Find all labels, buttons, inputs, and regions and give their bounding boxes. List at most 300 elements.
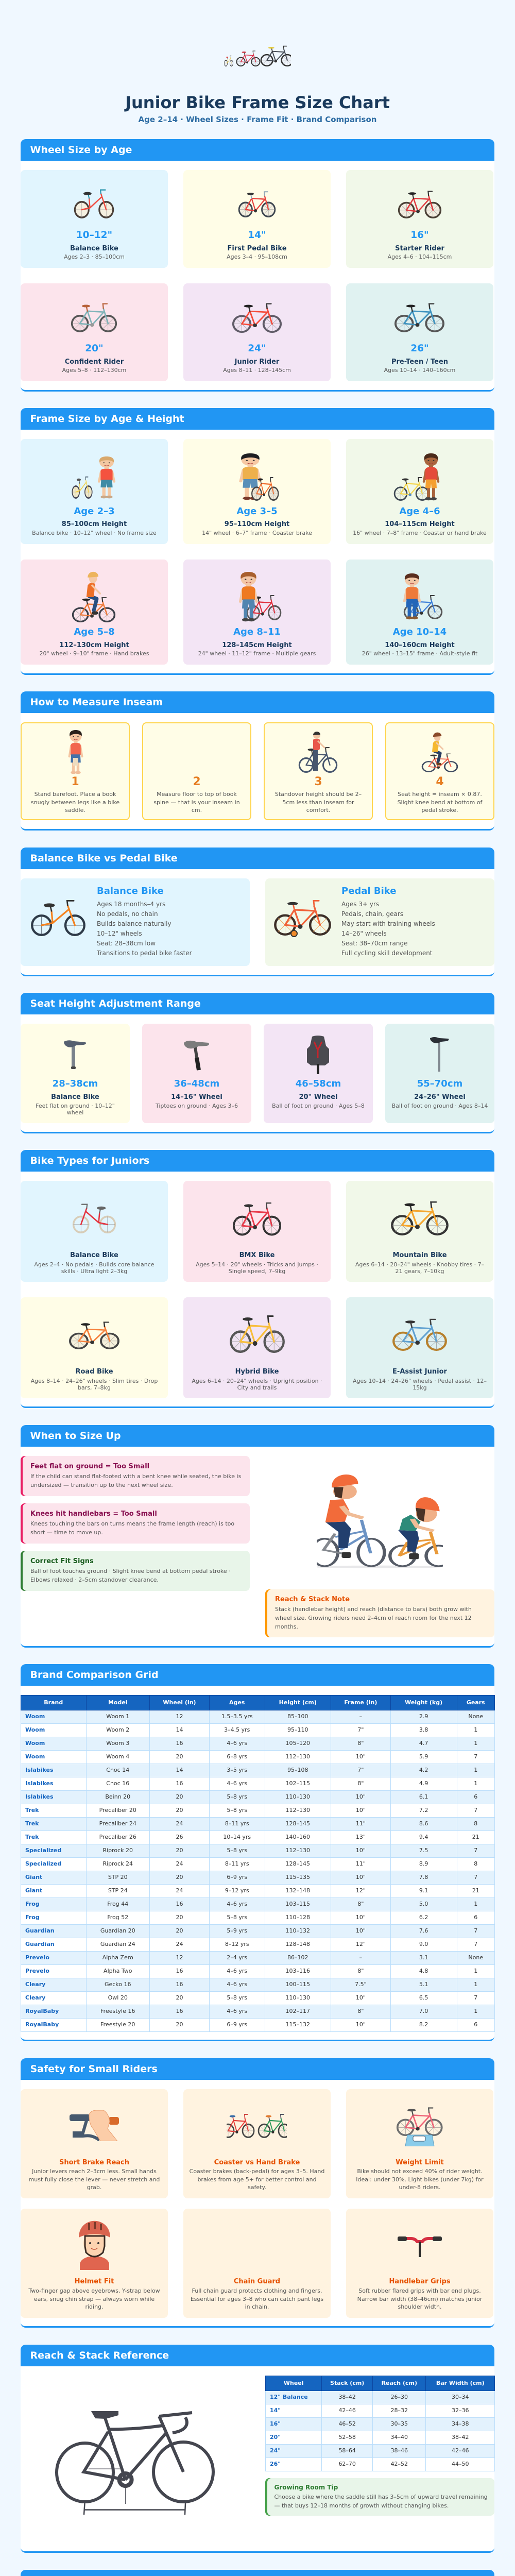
features list: Seat: 28–38cm low [97,940,156,947]
table: brands: Cnoc 16 [106,1780,129,1787]
features list: May start with training wheels [341,920,435,927]
table: brands: 3.8 [419,1726,428,1733]
table: brands: 6 [474,1914,477,1921]
description: Ages 10–14 · 24–26" wheels · Pedal assist · 12– [353,1378,487,1384]
step number: 4 [436,775,444,788]
table: brands: 10" [356,1874,366,1880]
table: reach and stack: 12" Balance [270,2394,308,2400]
table: brands: Gears [467,1699,485,1706]
table: brands: Precaliber 20 [99,1807,136,1814]
features list: Full cycling skill development [341,949,433,956]
table: brands: 8.2 [419,2021,428,2028]
icon: child with yellow bike [393,453,440,501]
table: brands: 4.9 [419,1780,428,1787]
range: 46–58cm [296,1078,341,1089]
card text: must fully close the lever — never stretch and [29,2176,160,2183]
table: brands: 20 [176,1793,183,1800]
table: brands: Islabikes [25,1767,54,1773]
card text: Ideal: under 30%. Light bikes (under 7kg) for [356,2176,484,2183]
icon: e-assist bike [392,1319,447,1351]
description: Ages 8–14 · 24–26" wheels · Slim tires · Drop [31,1378,158,1384]
table: brands: 1 [474,1780,477,1787]
table: brands: 20 [176,1914,183,1921]
table: brands: STP 24 [108,1887,128,1894]
card text [346,2167,493,2192]
table: brands: 6.1 [419,1793,428,1800]
table: brands: 6–9 yrs [227,2021,247,2028]
card text: in chain. [245,2303,269,2310]
card text: ears, snug chin strap — always worn while [34,2296,154,2302]
table: brands: Precaliber 26 [99,1834,136,1840]
table: brands: Guardian [25,1927,55,1934]
detail: Ages 5–8 · 112–130cm [62,367,126,374]
table: brands: 4.8 [419,1968,428,1974]
table: brands: 10" [356,1994,366,2001]
callout text: wheel size. Growing riders need 2–4cm of reach room for the next 12 [275,1615,472,1621]
table: brands: 3–5 yrs [227,1767,247,1773]
step number: 2 [193,775,201,788]
callout text: months. [275,1623,298,1630]
label: Balance Bike [70,245,118,252]
card: hybrid bike [183,1297,331,1398]
table: brands: 10" [356,1914,366,1921]
table: reach and stack: 42–46 [452,2447,469,2454]
table: brands: Beinn 20 [105,1793,130,1800]
card text: Full chain guard protects clothing and fingers. [192,2287,322,2294]
heading [21,993,494,1014]
table: brands: 10" [356,1793,366,1800]
table: brands: 24 [176,1941,183,1947]
table: reach and stack: Bar Width (cm) [436,2380,485,2386]
table: brands: 5–8 yrs [227,1914,247,1921]
table: brands: 2.9 [419,1713,428,1720]
heading [21,139,494,161]
table: brands: 10" [356,1753,366,1760]
instruction: Stand barefoot. Place a book [35,791,116,798]
icon: first pedal bike [238,191,276,217]
instruction: cm. [192,807,202,814]
icon: saddle on angled post [184,1041,209,1071]
table: brands: 26 [176,1834,183,1840]
table: brands: 103–115 [286,1901,310,1907]
detail: Ball of foot on ground · Ages 5–8 [272,1103,365,1109]
instruction: snugly between legs like a bike [31,799,119,806]
table: brands: 8–11 yrs [225,1820,249,1827]
table: brands: 110–130 [286,1793,310,1800]
panel: when to size up [21,1425,494,1648]
table: brands: 4–6 yrs [227,1780,247,1787]
heading: How to Measure Inseam [30,697,163,708]
icon: balance bike [74,190,114,218]
table: brands: 20 [176,1807,183,1814]
table: brands: 8–11 yrs [225,1860,249,1867]
table: brands: 5–9 yrs [227,1927,247,1934]
table: brands: 20 [176,2021,183,2028]
icon: saddle on tall post [430,1037,449,1072]
callout text [274,2493,488,2510]
table: brands: 110–128 [286,1914,310,1921]
table: brands: 7 [474,1753,477,1760]
table: brands: None [468,1713,483,1720]
table: brands: 16 [176,1981,183,1988]
table: brands: 105–120 [286,1740,310,1747]
title: Junior Bike Frame Size Chart [125,93,390,112]
table: brands: STP 20 [108,1874,128,1880]
table: brands: Wheel (in) [163,1699,196,1706]
instruction: pedal stroke. [421,807,458,814]
table: brands: Precaliber 24 [99,1820,136,1827]
icon: child in helmet [79,2221,110,2270]
features list [341,901,435,956]
card title: Helmet Fit [75,2278,114,2285]
height: 140–160cm Height [385,641,455,649]
card title: Handlebar Grips [389,2278,451,2285]
table: brands: 115–132 [286,2021,310,2028]
table: brands: 8" [357,1968,364,1974]
card: pedal bike [265,878,494,966]
table: reach and stack: 26" [270,2461,281,2467]
wheel size: 14" [248,230,266,241]
table: brands: 14 [176,1767,183,1773]
table: reach and stack: 44–50 [452,2461,469,2467]
callout: feet flat [21,1456,250,1496]
table: brands: Frog [25,1914,40,1921]
table: brands: 4.2 [419,1767,428,1773]
callout text: If the child can stand flat-footed with a bent knee while seated, the bike is [30,1472,241,1480]
card: age 10-14 [346,560,493,665]
table: brands: 12 [176,1954,183,1961]
callout text: undersized — transition up to the next wheel size. [30,1482,173,1488]
card text [21,2167,168,2192]
callout: growing room tip [265,2478,494,2516]
table: brands: 6 [474,2021,477,2028]
table: brands: Frame (in) [344,1699,377,1706]
heading [21,1150,494,1172]
table: brands: 10" [356,1847,366,1854]
description: City and trails [237,1384,277,1391]
instruction: saddle. [65,807,85,814]
table: brands: 5–8 yrs [227,1847,247,1854]
description: 15kg [413,1384,427,1391]
table: brands: 3.1 [419,1954,428,1961]
table: brands: 8 [474,1860,477,1867]
table: brands: Specialized [25,1860,61,1867]
wheel size: 24" [248,343,266,354]
table: brands: 103–116 [286,1968,310,1974]
table: brands: 5.1 [419,1981,428,1988]
card: short brake reach [21,2089,168,2198]
callout title: Knees hit handlebars = Too Small [30,1510,157,1518]
table: brands: 4–6 yrs [227,2008,247,2014]
table: brands: 4–6 yrs [227,1981,247,1988]
card: 16 inch [346,170,493,268]
wheel size: 16" [410,230,429,241]
icon: orange balance bike [31,900,85,936]
table: brands: 2–4 yrs [227,1954,247,1961]
callout: correct fit signs [21,1551,250,1591]
table: brands: 85–100 [287,1713,308,1720]
step number: 1 [71,775,79,788]
instruction [153,791,240,814]
callout text: Elbows relaxed · 2–5cm standover clearance. [30,1577,159,1583]
card: e-assist junior [346,1297,493,1398]
table: brands: Woom 2 [106,1726,129,1733]
detail: 20" wheel · 9–10" frame · Hand brakes [40,650,149,657]
card: road bike [21,1297,168,1398]
description: Ages 6–14 · 20–24" wheels · Knobby tires · 7– [355,1261,484,1267]
card: 10-12 inch [21,170,168,268]
heading: Frame Size by Age & Height [30,413,184,425]
table: brands: RoyalBaby [25,2021,59,2028]
heading [21,2570,494,2576]
instruction: Standover height should be 2– [275,791,362,798]
table: brands: 7 [474,1994,477,2001]
card text: Coaster brakes (back-pedal) for ages 3–5. Hand [190,2168,324,2175]
instruction: Measure floor to top of book [157,791,237,798]
features list: Ages 3+ yrs [341,901,379,908]
description: Ages 5–14 · 20" wheels · Tricks and jumps · [196,1261,318,1267]
card: 14 inch [183,170,331,268]
age: Age 3–5 [236,506,278,517]
table: brands: 4–6 yrs [227,1901,247,1907]
card: mountain bike [346,1181,493,1282]
instruction [398,791,483,814]
table: brands: 112–130 [286,1807,310,1814]
icon: three bikes logo [224,45,291,66]
description: 21 gears, 7–10kg [395,1267,444,1275]
table: reach and stack: 30–34 [452,2394,469,2400]
table: reach and stack: 34–38 [452,2420,469,2427]
callout text: short — time to move up. [30,1529,103,1535]
heading: Bike Types for Juniors [30,1155,149,1166]
icon: starter bike [398,191,442,218]
callout title: Feet flat on ground = Too Small [30,1463,149,1470]
table: brands: None [468,1954,483,1961]
table: brands: 6 [474,1793,477,1800]
detail: 14" wheel · 6–7" frame · Coaster brake [202,530,312,536]
table: brands: 100–115 [286,1981,310,1988]
table: brands: Guardian 24 [100,1941,135,1947]
table: brands: Trek [25,1834,39,1840]
table: brands: 20 [176,1994,183,2001]
table: brands: Riprock 24 [102,1860,133,1867]
table: brands: 1 [474,1767,477,1773]
table: brands: 1 [474,1968,477,1974]
callout text: Choose a bike where the saddle still has 3–5cm of upward travel remaining [274,2494,488,2500]
table: brands: 10" [356,2021,366,2028]
card text: grab. [87,2184,101,2191]
callout title: Reach & Stack Note [275,1596,350,1603]
table: reach and stack: 38–46 [390,2447,408,2454]
icon: road bike silhouette [54,2410,215,2515]
name: Balance Bike [70,1251,118,1259]
table: brands: 16 [176,2008,183,2014]
table: brands: 6–8 yrs [227,1753,247,1760]
card: age 8-11 [183,560,331,665]
features list: 10–12" wheels [97,929,142,937]
card: 28-38cm [21,1024,130,1123]
table: reach and stack: 38–42 [452,2434,469,2441]
table: brands: Freestyle 16 [100,2008,135,2014]
card text: Junior levers reach 2–3cm less. Small hands [32,2168,157,2175]
heading: Seat Height Adjustment Range [30,998,201,1009]
height: 112–130cm Height [59,641,129,649]
icon: junior bike [232,303,282,333]
icon: hybrid bike [230,1315,285,1353]
detail: Balance bike · 10–12" wheel · No frame size [32,530,157,536]
table: reach and stack: 52–58 [338,2434,356,2441]
card text: Soft rubber flared grips with bar end plugs. [358,2287,481,2294]
range: 55–70cm [417,1078,462,1089]
table: reach and stack: 32–36 [452,2407,469,2414]
table: brands: 1 [474,2008,477,2014]
icon: child with orange bike [239,453,279,501]
card: age 4-6 [346,439,493,544]
name: E-Assist Junior [392,1368,447,1376]
age: Age 10–14 [393,626,447,637]
card: balance bike [21,878,250,966]
table: brands: 95–108 [287,1767,308,1773]
instruction: spine — that is your inseam in [153,799,240,806]
description: Ages 6–14 · 20–24" wheels · Upright position · [192,1378,322,1384]
table: brands: Owl 20 [108,1994,128,2001]
table: brands: Gecko 16 [105,1981,131,1988]
table: brands: 102–115 [286,1780,310,1787]
callout text: Knees touching the bars on turns means the frame length (reach) is too [30,1520,234,1527]
table: reach and stack: 24" [270,2447,281,2454]
table: brands: – [359,1954,362,1961]
detail: Ages 10–14 · 140–160cm [384,367,455,374]
card: balance bike [21,1181,168,1282]
heading [21,1664,494,1686]
icon: child riding red bike [421,733,458,772]
card: 36-48cm [142,1024,251,1123]
icon: child seat [307,1036,329,1074]
table: reach and stack: 30–35 [390,2420,408,2427]
callout text [275,1604,472,1631]
table: brands: 6.5 [419,1994,428,2001]
table: brands: 12" [356,1941,366,1947]
table: brands: 16 [176,1901,183,1907]
features list [97,901,192,956]
icon: orange pedal bike with training wheels [274,900,331,937]
table: brands: Islabikes [25,1793,54,1800]
wheel size: 20" [85,343,104,354]
card text [183,2167,331,2192]
description: Single speed, 7–9kg [229,1267,285,1275]
table: brands: Specialized [25,1847,61,1854]
card: step 4 [385,722,494,820]
instruction: 5cm less than inseam for [282,799,354,806]
table: brands: Riprock 20 [102,1847,133,1854]
table: brands: 7.5 [419,1847,428,1854]
instruction: comfort. [306,807,330,814]
table: brands: Cleary [25,1981,45,1988]
table: brands: 8 [474,1820,477,1827]
instruction: Seat height = inseam × 0.87. [398,791,482,798]
table: brands: 110–132 [286,1927,310,1934]
wheel size: 10–12" [76,230,112,241]
table: brands: 7.2 [419,1807,428,1814]
icon: child riding orange bike [72,572,115,622]
callout text: — that buys 12–18 months of growth without changing bikes. [274,2502,449,2509]
table: brands: 110–130 [286,1994,310,2001]
instruction: Slight knee bend at bottom of [398,799,482,806]
table: brands: 1.5–3.5 yrs [221,1713,253,1720]
detail: Ages 8–11 · 128–145cm [223,367,291,374]
table: brands: Islabikes [25,1780,54,1787]
card: step 1 [21,722,130,820]
table: brands: 10" [356,1927,366,1934]
table: reach and stack: 46–52 [338,2420,356,2427]
icon: toddler with balance bike [72,456,115,499]
table: brands: Woom 3 [106,1740,129,1747]
table: brands: 5–8 yrs [227,1807,247,1814]
table: brands: 13" [356,1834,366,1840]
name: Hybrid Bike [235,1368,279,1376]
card: age 3-5 [183,439,331,544]
table: brands: 8" [357,2008,364,2014]
table: brands: 128–148 [286,1941,310,1947]
table: brands: RoyalBaby [25,2008,59,2014]
table: brands: 3–4.5 yrs [224,1726,250,1733]
table: brands: 5.0 [419,1901,428,1907]
description [196,1261,318,1275]
icon: two bikes [227,2113,287,2138]
detail: Ball of foot on ground · Ages 8–14 [392,1103,488,1109]
table: brands: 6–9 yrs [227,1874,247,1880]
table: brands: Height (cm) [279,1699,317,1706]
label: 20" Wheel [299,1093,338,1101]
heading: Brand Comparison Grid [30,1669,159,1681]
card text: Bike should not exceed 40% of rider weight. [357,2168,483,2175]
heading: Safety for Small Riders [30,2063,158,2075]
table: brands: Frog 52 [107,1914,128,1921]
height: 104–115cm Height [385,520,455,528]
icon: child with red bike [239,572,281,621]
card title: Short Brake Reach [59,2159,129,2166]
label: Junior Rider [235,358,279,366]
detail: 24" wheel · 11–12" frame · Multiple gears [198,650,316,657]
table: brands: 1 [474,1901,477,1907]
card: BMX bike [183,1181,331,1282]
table: reach and stack: 38–42 [338,2394,356,2400]
panel: wheel size by age [21,139,494,392]
table: brands: 1 [474,1981,477,1988]
features list: No pedals, no chain [97,910,158,917]
icon: saddle on short post [64,1040,86,1069]
table: brands: – [359,1713,362,1720]
name: BMX Bike [239,1251,274,1259]
table: brands: 86–102 [287,1954,308,1961]
icon: pre-teen bike [394,303,444,332]
table: reach and stack: Reach (cm) [381,2380,417,2386]
icon: child standing over bike [299,732,338,773]
table: brands: 16 [176,1740,183,1747]
card text: Essential for ages 3–8 who can catch pant legs [191,2296,323,2302]
table: reach and stack: 62–70 [338,2461,356,2467]
table: brands: 95–110 [287,1726,308,1733]
panel: frame size by age and height [21,408,494,675]
label: Pre-Teen / Teen [391,358,448,366]
detail [36,1103,115,1116]
detail: Tiptoes on ground · Ages 3–6 [156,1103,238,1109]
features list: 14–26" wheels [341,929,387,937]
icon: hand on brake lever [70,2110,119,2141]
table: brands: Alpha Two [104,1968,132,1974]
detail: Ages 3–4 · 95–108cm [227,253,287,260]
table: brands: 16 [176,1968,183,1974]
